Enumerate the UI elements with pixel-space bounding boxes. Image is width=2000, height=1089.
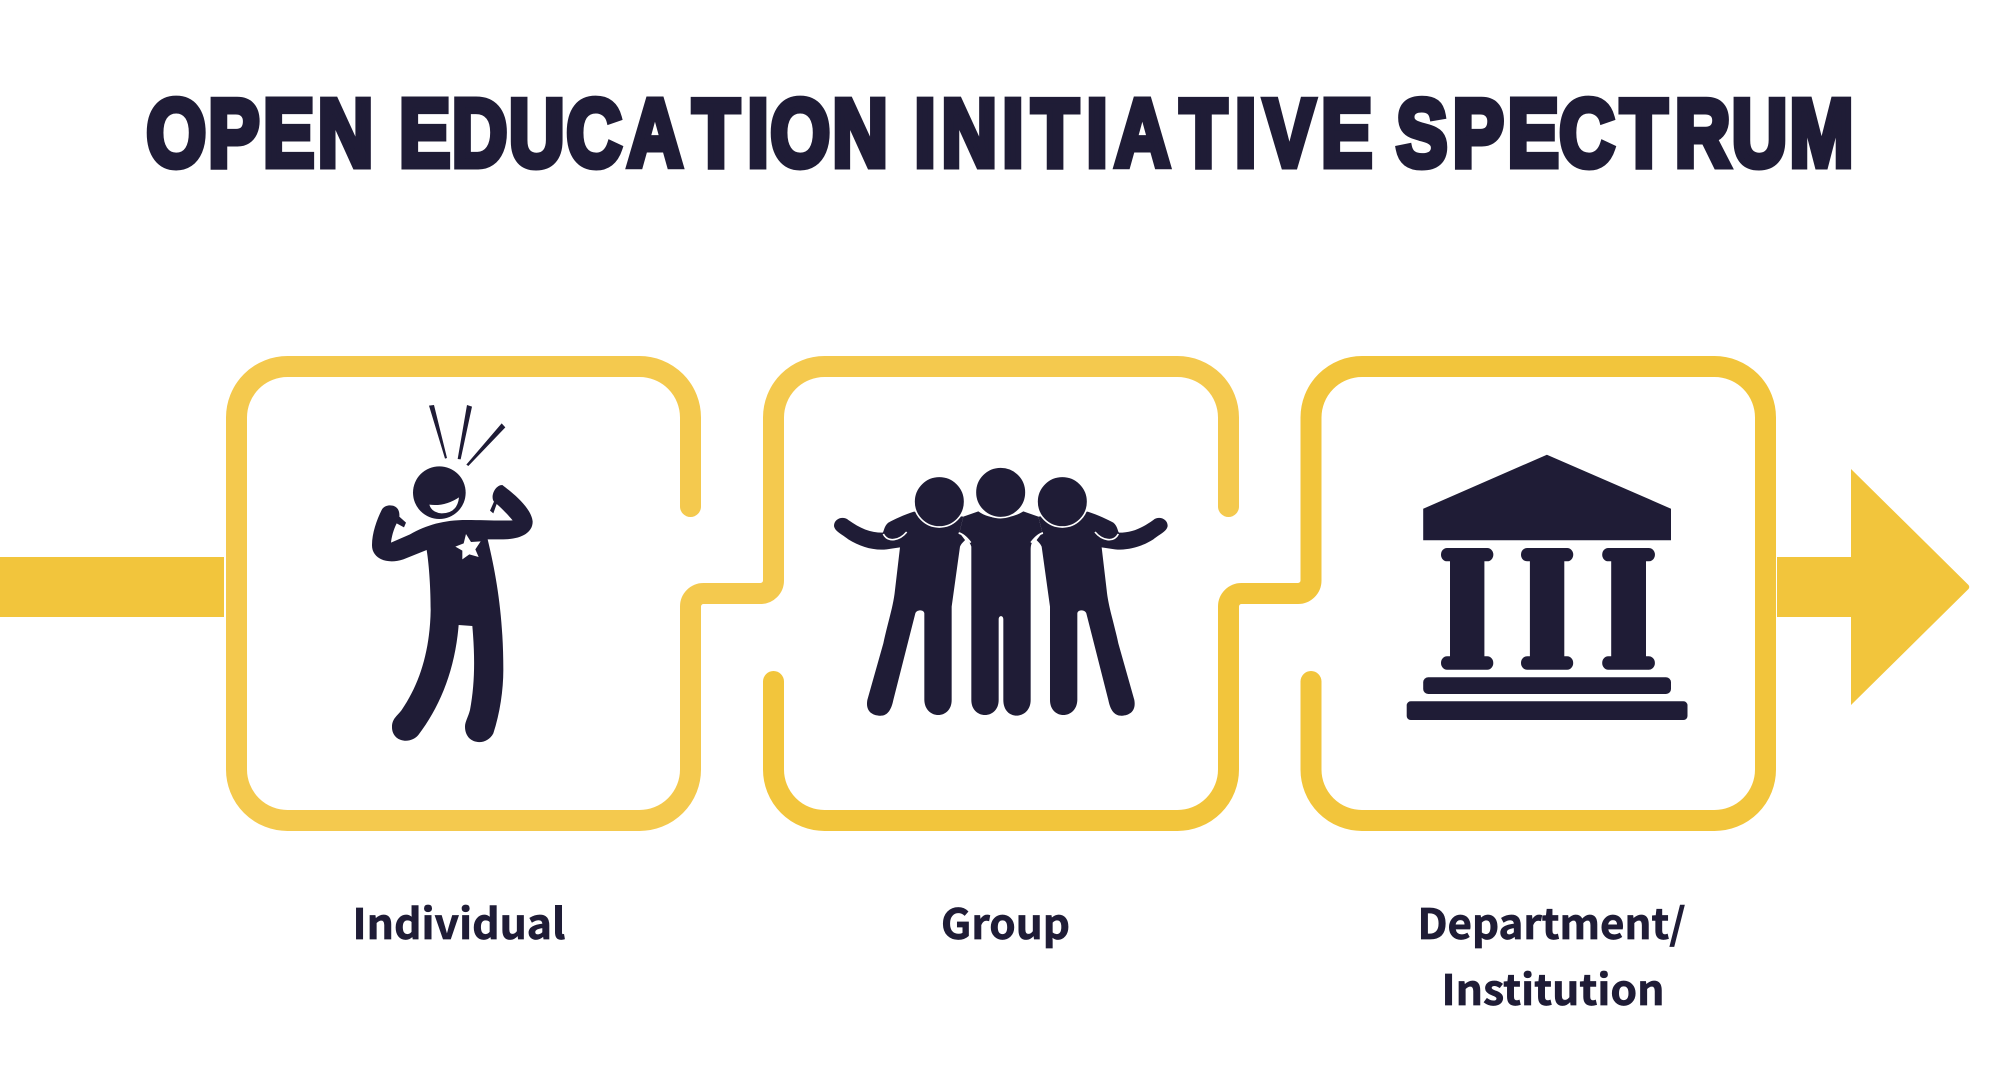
label: group: Group [941,891,1070,952]
icon part: body [372,485,533,742]
label: department / institution: Department/ [1418,891,1686,952]
icon part: centre person body [959,511,1042,716]
label: department / institution [1418,891,1686,1018]
label: individual: Individual [352,891,566,952]
icon part: heads [914,467,1088,527]
icon: institution building [1407,455,1688,720]
title: SPECTRUM [1396,80,1853,187]
connector path: individual box into group box [236,366,1228,820]
title: INITIATIVE [914,80,1372,187]
icon part: column right [1602,548,1655,670]
icon: group of three people [834,467,1168,716]
label: department / institution: Institution [1442,957,1664,1018]
icon part: roof [1423,455,1671,540]
icon part: upper step [1423,677,1671,694]
icon part: column middle [1521,548,1573,670]
icon part: arm outlines [883,532,1118,543]
icon part: head [413,466,466,519]
icon part: burst rays [429,405,505,466]
connector path: group box into department box [774,366,1766,820]
icon part: star [455,534,481,559]
icon part: column left [1441,548,1493,670]
arrow: incoming bar [0,557,224,617]
icon part: smile [429,497,459,513]
icon part: left person body [834,512,965,716]
icon part: lower step [1407,701,1688,720]
arrow: outgoing [1777,469,1969,705]
icon part: right person body [1037,512,1168,716]
title [146,80,1853,187]
title: EDUCATION [399,80,888,187]
title: OPEN [146,80,373,187]
icon: individual person [372,405,533,742]
